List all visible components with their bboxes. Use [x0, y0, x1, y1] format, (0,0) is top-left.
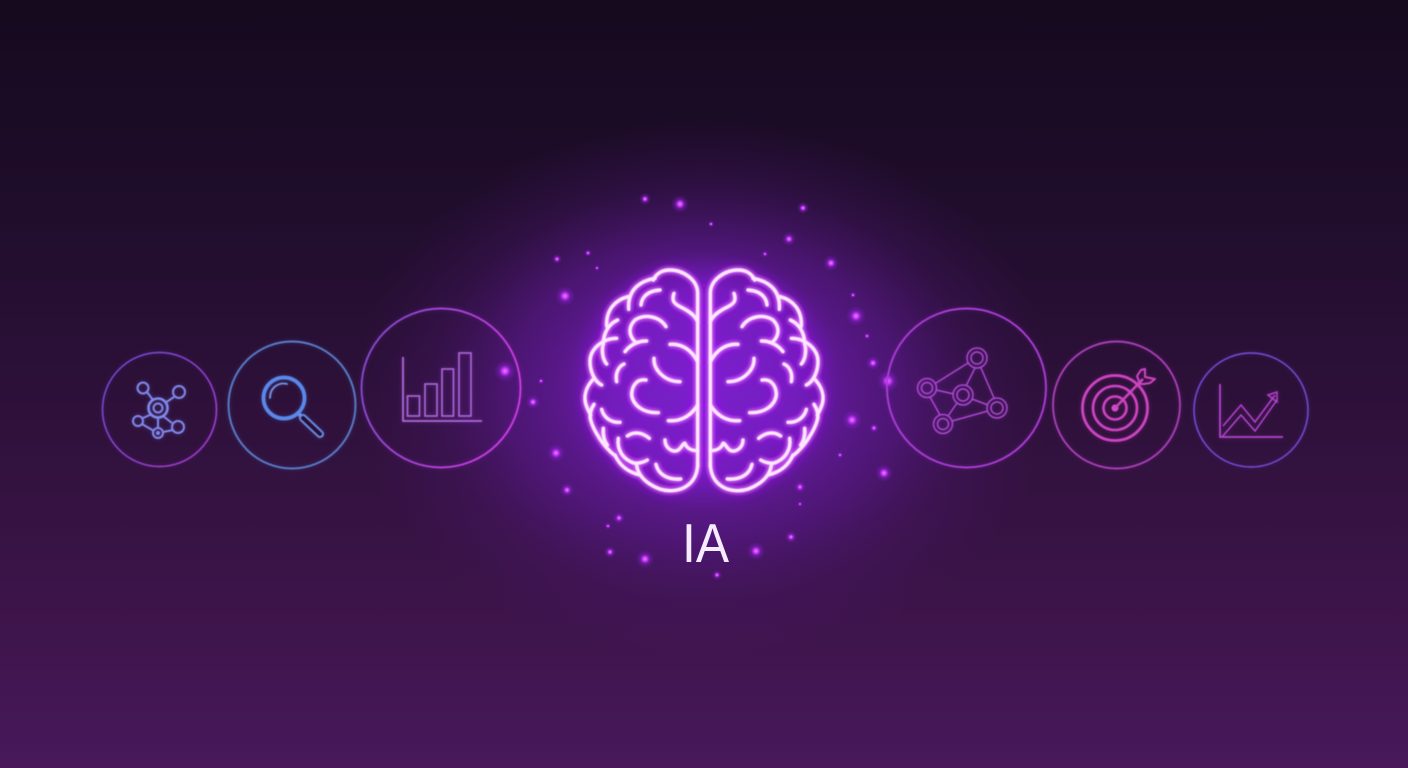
icon: network hub in circle [102, 352, 216, 466]
central purple glow [354, 120, 1054, 660]
right hemisphere [710, 270, 823, 491]
icon: magnifying glass in circle [228, 342, 356, 468]
icon: bar chart in circle [362, 308, 520, 468]
icon: target with arrow in circle [1053, 342, 1180, 468]
left hemisphere [585, 270, 698, 491]
icon: rising line chart in circle [1194, 353, 1308, 467]
glow behind brain [569, 250, 839, 510]
glowing particles [494, 193, 899, 580]
central neon brain [585, 270, 823, 491]
title: IA: IA [682, 512, 729, 574]
icon: molecule network in circle [887, 308, 1046, 468]
